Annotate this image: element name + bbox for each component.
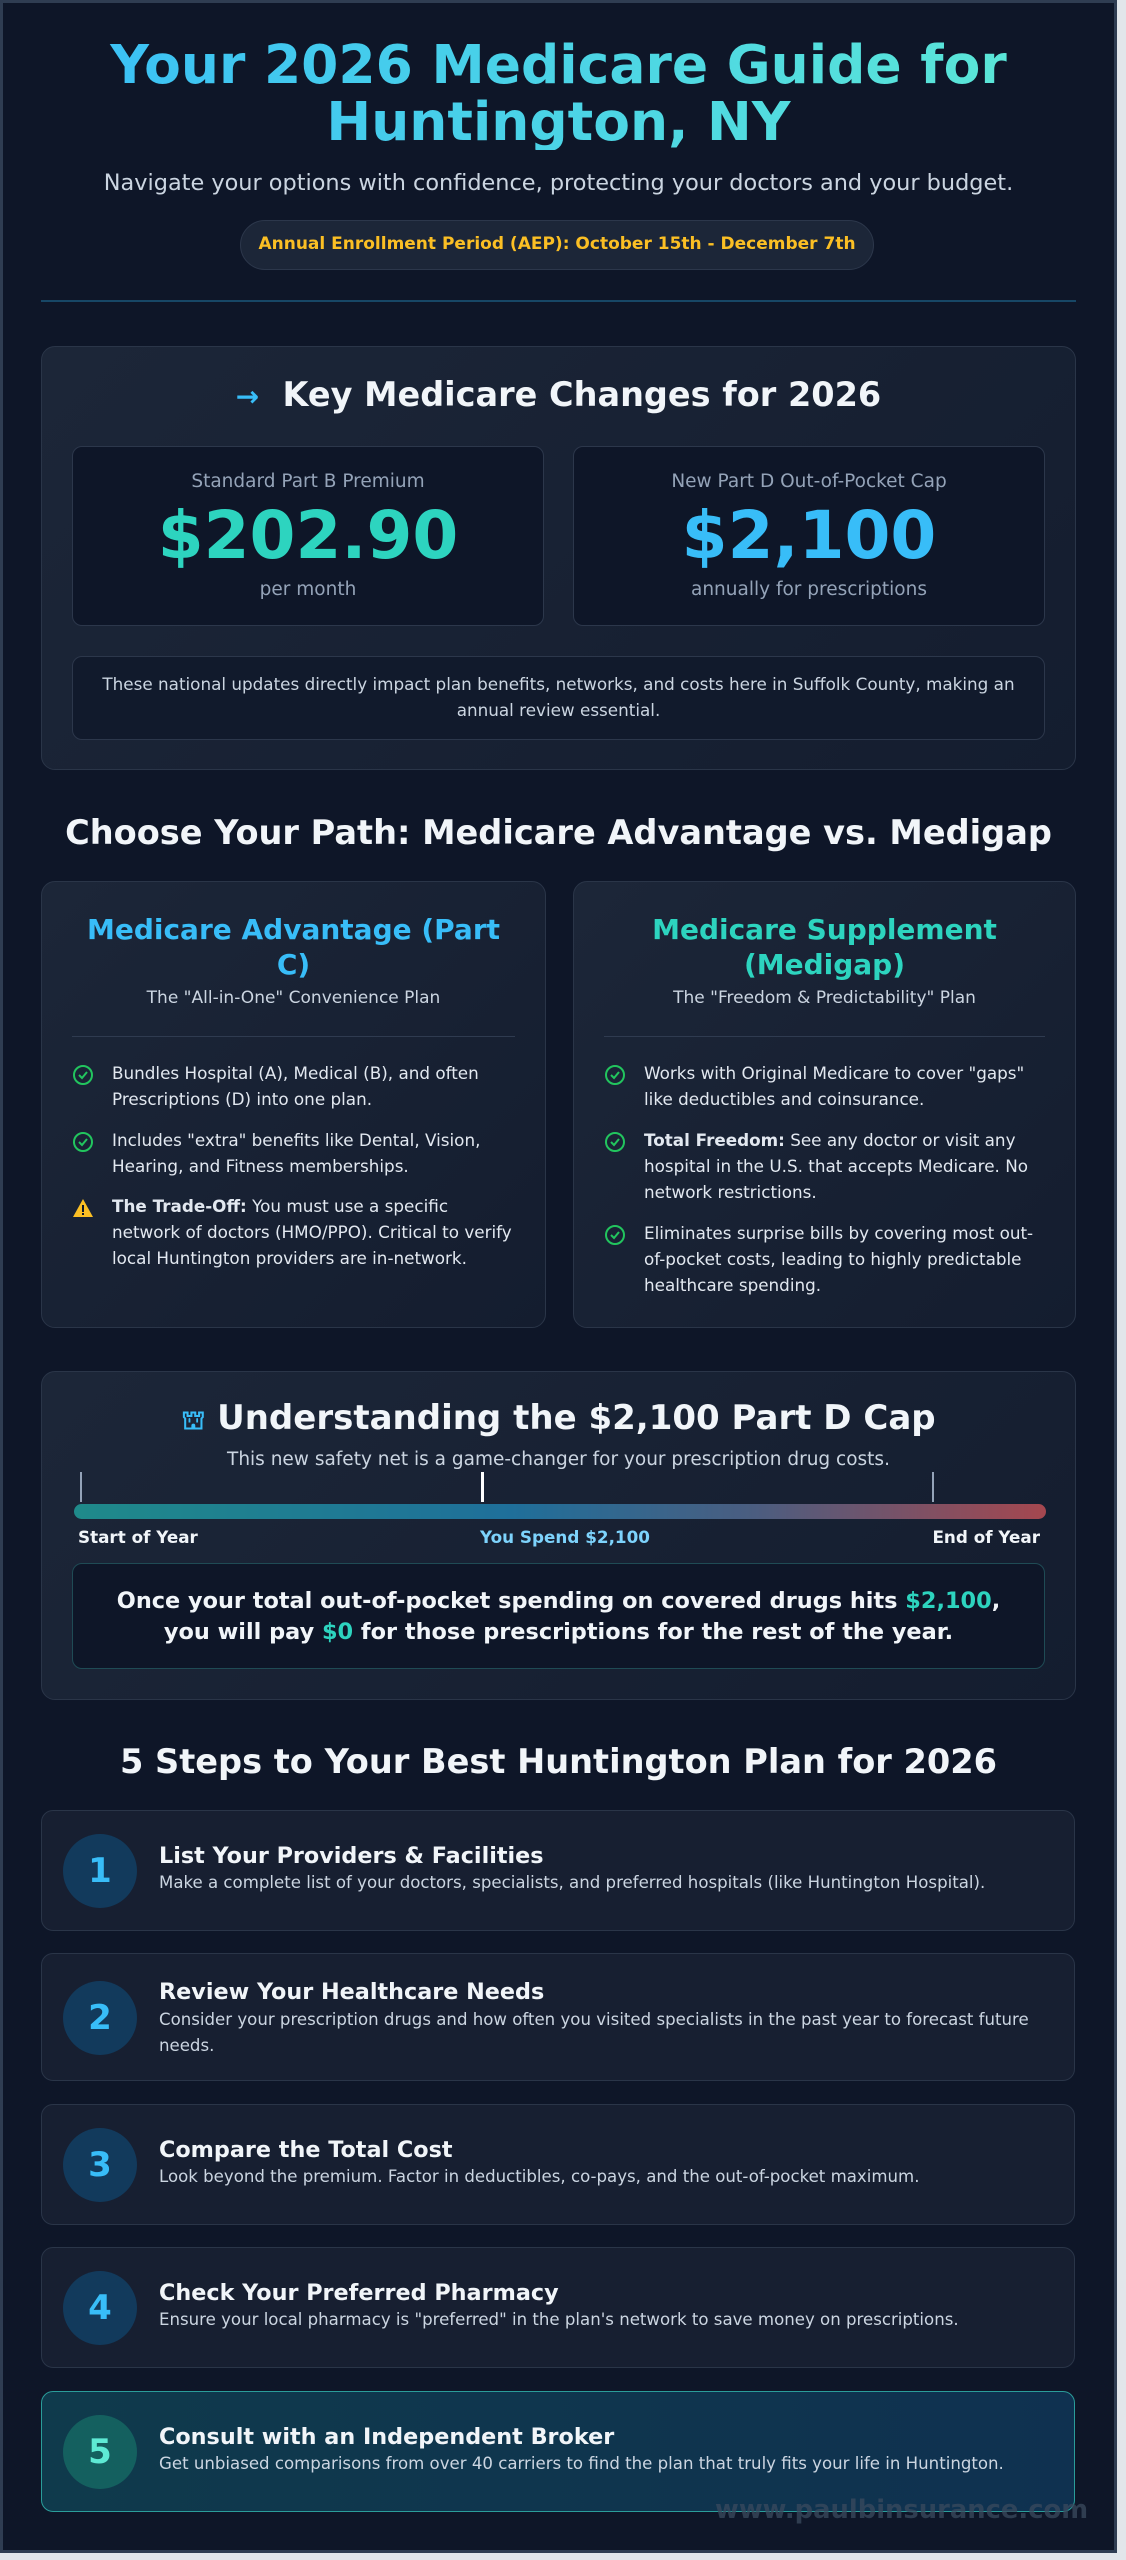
panel: medigap: The "Freedom & Predictability" Plan xyxy=(673,988,976,1008)
list item: Bundles Hospital (A), Medical (B), and often Prescriptions (D) into one plan. xyxy=(112,1063,479,1109)
callout: Once your total out-of-pocket spending on covered drugs hits $2,100, xyxy=(117,1588,1000,1614)
step 3: Look beyond the premium. Factor in deductibles, co-pays, and the out-of-pocket maximum. xyxy=(159,2167,919,2186)
panel: key changes xyxy=(41,346,1076,770)
step 1 xyxy=(41,1810,1075,1931)
callout xyxy=(72,1563,1045,1669)
panel: medicare advantage: Medicare Advantage (Part C) xyxy=(87,913,500,981)
step 4: Check Your Preferred Pharmacy xyxy=(159,2280,559,2306)
card: part D cap: $2,100 xyxy=(682,497,936,574)
step 1: 1 xyxy=(88,1851,112,1891)
card: part B premium xyxy=(72,446,544,626)
step 4: 4 xyxy=(88,2288,112,2328)
note: These national updates directly impact plan benefits, networks, and costs here in Suffolk County, making an annual review essential. xyxy=(102,674,1015,720)
step 2: 2 xyxy=(88,1998,112,2038)
title: Your 2026 Medicare Guide for xyxy=(110,33,1007,96)
card: part D cap: New Part D Out-of-Pocket Cap xyxy=(671,471,947,492)
callout: you will pay $0 for those prescriptions for the rest of the year. xyxy=(164,1619,953,1645)
step 4 xyxy=(41,2247,1075,2368)
list item: Eliminates surprise bills by covering most out-of-pocket costs, leading to highly predictable healthcare spending. xyxy=(644,1223,1033,1295)
panel: part D cap xyxy=(41,1371,1076,1700)
note xyxy=(72,656,1045,740)
step 1: Make a complete list of your doctors, specialists, and preferred hospitals (like Huntington Hospital). xyxy=(159,1873,985,1892)
title: Huntington, NY xyxy=(326,90,791,153)
watermark: www.paulbinsurance.com xyxy=(715,2495,1088,2525)
timeline chart: End of Year xyxy=(932,1527,1040,1547)
card: part D cap xyxy=(573,446,1045,626)
panel: medicare advantage xyxy=(41,881,546,1328)
step 2: Review Your Healthcare Needs xyxy=(159,1979,544,2005)
pill: enrollment period: Annual Enrollment Period (AEP): October 15th - December 7th xyxy=(258,234,856,254)
step 3: 3 xyxy=(88,2145,112,2185)
title xyxy=(3,36,1114,150)
panel: medigap xyxy=(573,881,1076,1328)
step 5: Get unbiased comparisons from over 40 carriers to find the plan that truly fits your life in Huntington. xyxy=(159,2454,1004,2473)
timeline chart xyxy=(74,1472,1046,1547)
heading: choose your path: Choose Your Path: Medicare Advantage vs. Medigap xyxy=(65,813,1052,852)
panel: medigap: Medicare Supplement (Medigap) xyxy=(652,913,997,981)
step 2 xyxy=(41,1953,1075,2081)
card: part B premium: per month xyxy=(260,579,356,600)
step 4: Ensure your local pharmacy is "preferred" in the plan's network to save money on prescriptions. xyxy=(159,2310,959,2329)
panel: part D cap: This new safety net is a game-changer for your prescription drug costs. xyxy=(227,1449,890,1470)
card: part B premium: $202.90 xyxy=(158,497,458,574)
panel: medicare advantage: The "All-in-One" Convenience Plan xyxy=(147,988,440,1008)
list item: trade-off: The Trade-Off: You must use a specific network of doctors (HMO/PPO). Critical to verify local Huntington providers are in-network. xyxy=(112,1196,512,1268)
subtitle: Navigate your options with confidence, protecting your doctors and your budget. xyxy=(104,170,1013,196)
step 5: Consult with an Independent Broker xyxy=(159,2424,614,2450)
list item: Includes "extra" benefits like Dental, Vision, Hearing, and Fitness memberships. xyxy=(112,1130,480,1176)
step 1: List Your Providers & Facilities xyxy=(159,1843,544,1869)
step 2: Consider your prescription drugs and how often you visited specialists in the past year to forecast future needs. xyxy=(159,2010,1029,2055)
card: part D cap: annually for prescriptions xyxy=(691,579,927,600)
list item: Total Freedom: See any doctor or visit any hospital in the U.S. that accepts Medicare. No network restrictions. xyxy=(644,1130,1028,1202)
step 3 xyxy=(41,2104,1075,2225)
pill: enrollment period xyxy=(240,220,874,270)
heading: part D cap: ⛫ Understanding the $2,100 Part D Cap xyxy=(181,1398,936,1438)
step 5: 5 xyxy=(88,2432,112,2472)
timeline chart: You Spend $2,100 xyxy=(480,1527,650,1547)
step 3: Compare the Total Cost xyxy=(159,2137,453,2163)
list item: Works with Original Medicare to cover "gaps" like deductibles and coinsurance. xyxy=(644,1063,1024,1109)
timeline chart: Start of Year xyxy=(78,1527,198,1547)
heading: 5 steps: 5 Steps to Your Best Huntington Plan for 2026 xyxy=(120,1742,997,1781)
step 5 xyxy=(41,2391,1075,2512)
card: part B premium: Standard Part B Premium xyxy=(191,471,425,492)
heading: key changes: → Key Medicare Changes for 2026 xyxy=(236,375,881,414)
